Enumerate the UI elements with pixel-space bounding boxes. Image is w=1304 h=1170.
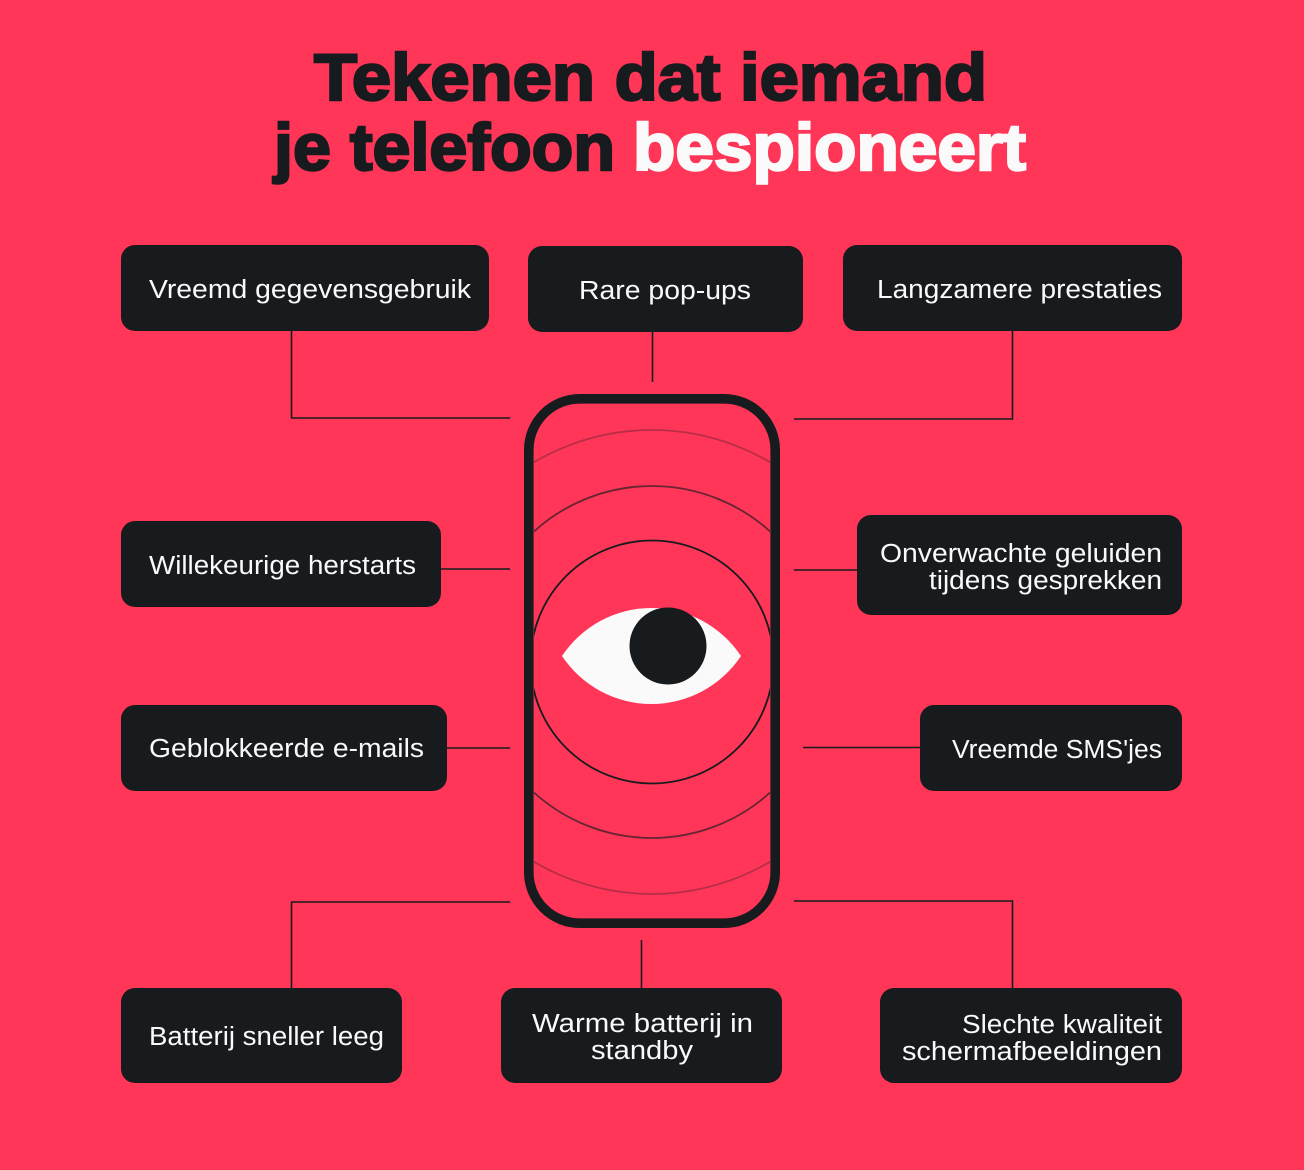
label: Batterij sneller leeg	[121, 988, 402, 1083]
label: Langzamere prestaties: Langzamere prestaties	[877, 276, 1162, 304]
label: Warme batterij in standby	[501, 988, 782, 1083]
title: je telefoon	[272, 110, 615, 184]
label: Slechte kwaliteit schermafbeeldingen: schermafbeeldingen	[902, 1038, 1162, 1066]
label: Onverwachte geluiden tijdens gesprekken	[857, 515, 1182, 615]
phone outline	[529, 399, 775, 923]
label: Onverwachte geluiden tijdens gesprekken: Onverwachte geluiden	[880, 540, 1162, 568]
label: Geblokkeerde e-mails	[121, 705, 447, 791]
label: Warme batterij in standby: Warme batterij in	[532, 1010, 753, 1038]
title: Tekenen dat iemand	[314, 40, 987, 114]
icon: eye	[562, 608, 741, 704]
label: Warme batterij in standby: standby	[591, 1037, 693, 1065]
label: Slechte kwaliteit schermafbeeldingen	[880, 988, 1182, 1083]
label: Vreemd gegevensgebruik: Vreemd gegevensgebruik	[149, 276, 471, 304]
label: Vreemde SMS'jes: Vreemde SMS'jes	[952, 736, 1162, 764]
title	[272, 40, 1026, 184]
label: Slechte kwaliteit schermafbeeldingen: Slechte kwaliteit	[962, 1011, 1162, 1039]
label: Willekeurige herstarts: Willekeurige herstarts	[149, 552, 416, 580]
signal rings	[534, 429, 770, 895]
phone with signal rings	[524, 394, 780, 928]
label: Willekeurige herstarts	[121, 521, 441, 607]
label: Vreemd gegevensgebruik	[121, 245, 489, 331]
label: Geblokkeerde e-mails: Geblokkeerde e-mails	[149, 735, 424, 763]
label: Rare pop-ups	[528, 246, 803, 332]
label: Rare pop-ups: Rare pop-ups	[579, 277, 751, 305]
label: Onverwachte geluiden tijdens gesprekken: tijdens gesprekken	[929, 567, 1162, 595]
connector lines	[292, 331, 1012, 988]
label: Batterij sneller leeg: Batterij sneller leeg	[149, 1023, 384, 1051]
title: bespioneert	[633, 110, 1026, 184]
label: Langzamere prestaties	[843, 245, 1182, 331]
label: Vreemde SMS'jes	[920, 705, 1182, 791]
